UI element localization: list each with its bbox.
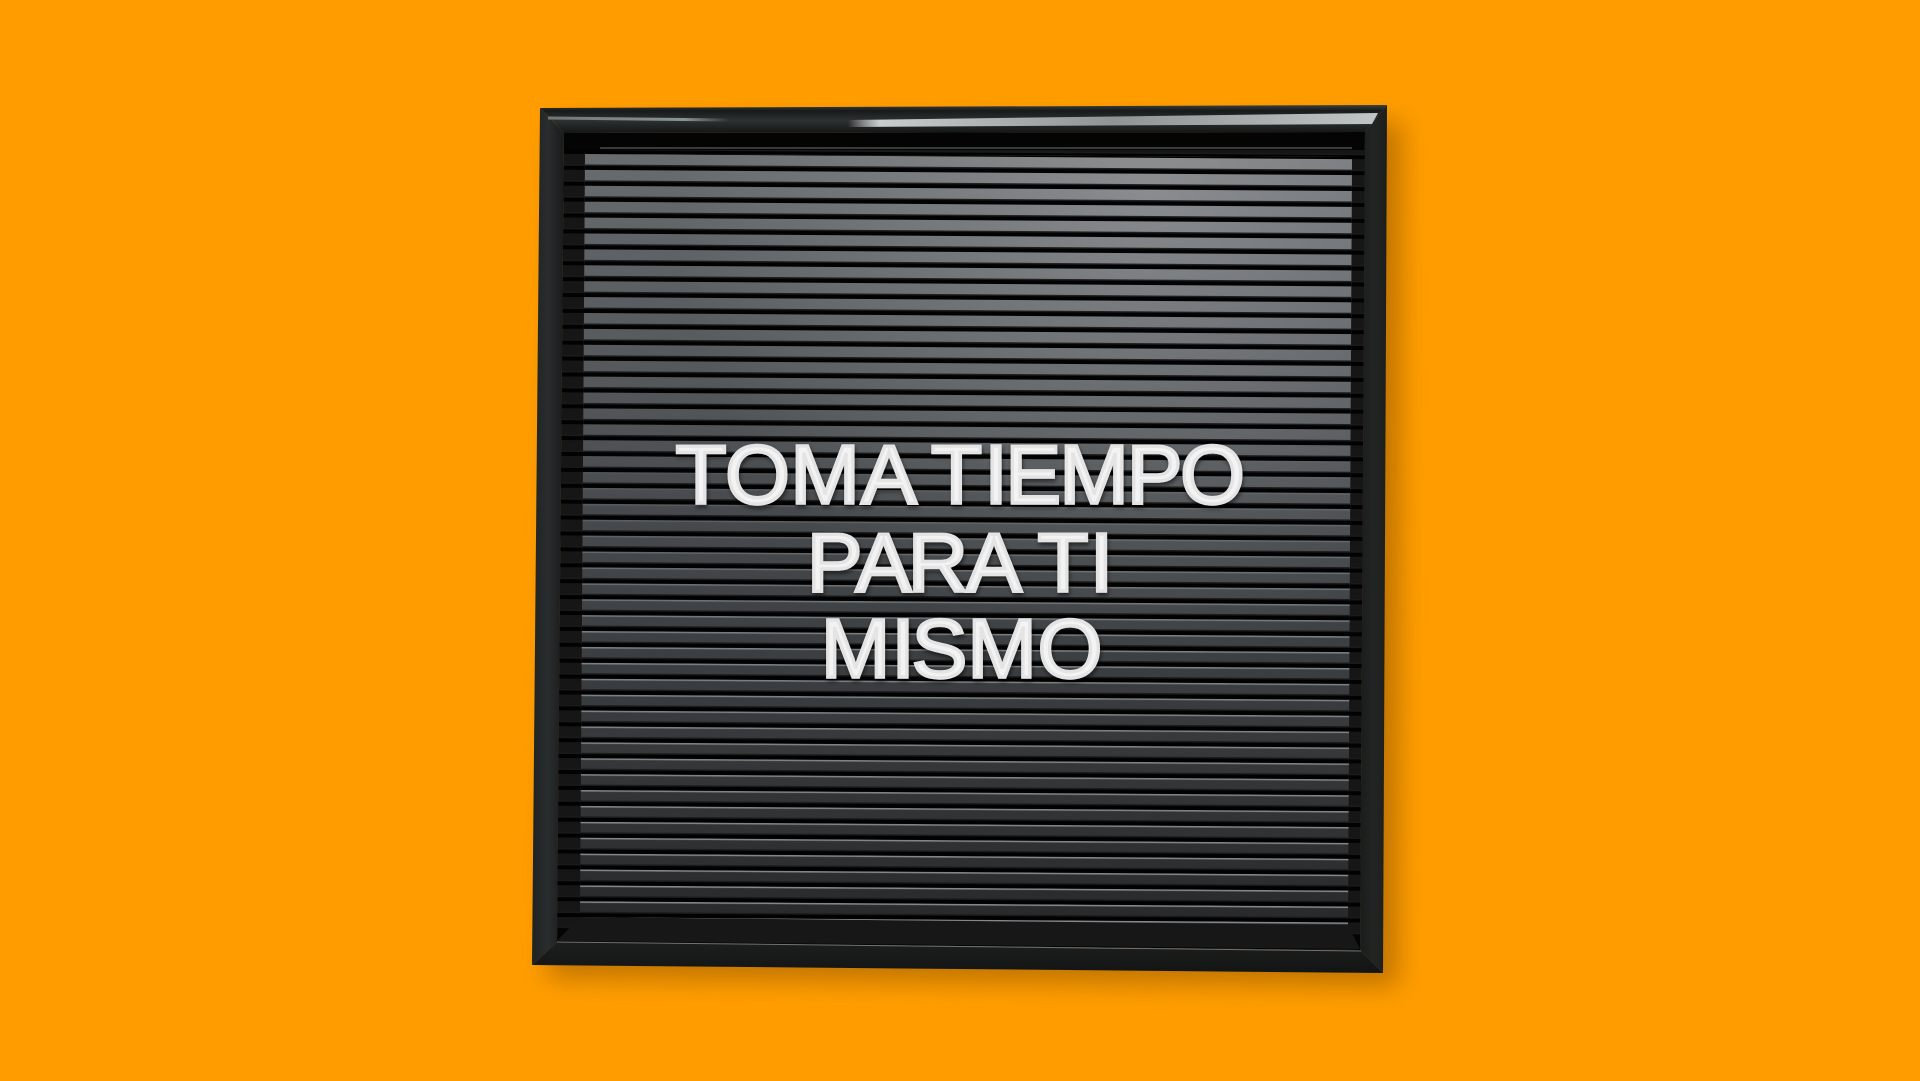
frame highlight: top left <box>548 118 730 120</box>
channel slat ends <box>550 145 1380 945</box>
slats <box>570 145 1360 935</box>
frame highlight: bottom edge <box>557 942 1361 951</box>
slat highlights <box>580 488 1350 924</box>
letter board <box>532 105 1387 973</box>
top slat sliver <box>600 147 1352 149</box>
board shadow area under slats <box>557 917 1360 949</box>
line 3: MISMO <box>821 602 1102 695</box>
slat base tone <box>570 145 1360 935</box>
frame highlight: top right <box>848 113 1378 127</box>
line 2: PARA TI <box>807 516 1113 609</box>
frame: left rail <box>532 108 564 965</box>
line 1: TOMA TIEMPO <box>676 428 1245 521</box>
frame: top rail <box>540 105 1387 133</box>
slat gaps <box>570 145 1360 935</box>
drop shadow of the letter board <box>548 122 1402 986</box>
slat upper right sheen <box>779 156 1352 579</box>
frame: bottom rail <box>532 942 1383 973</box>
message letters <box>676 428 1245 695</box>
board channel <box>557 132 1365 950</box>
frame: right rail <box>1360 105 1387 973</box>
